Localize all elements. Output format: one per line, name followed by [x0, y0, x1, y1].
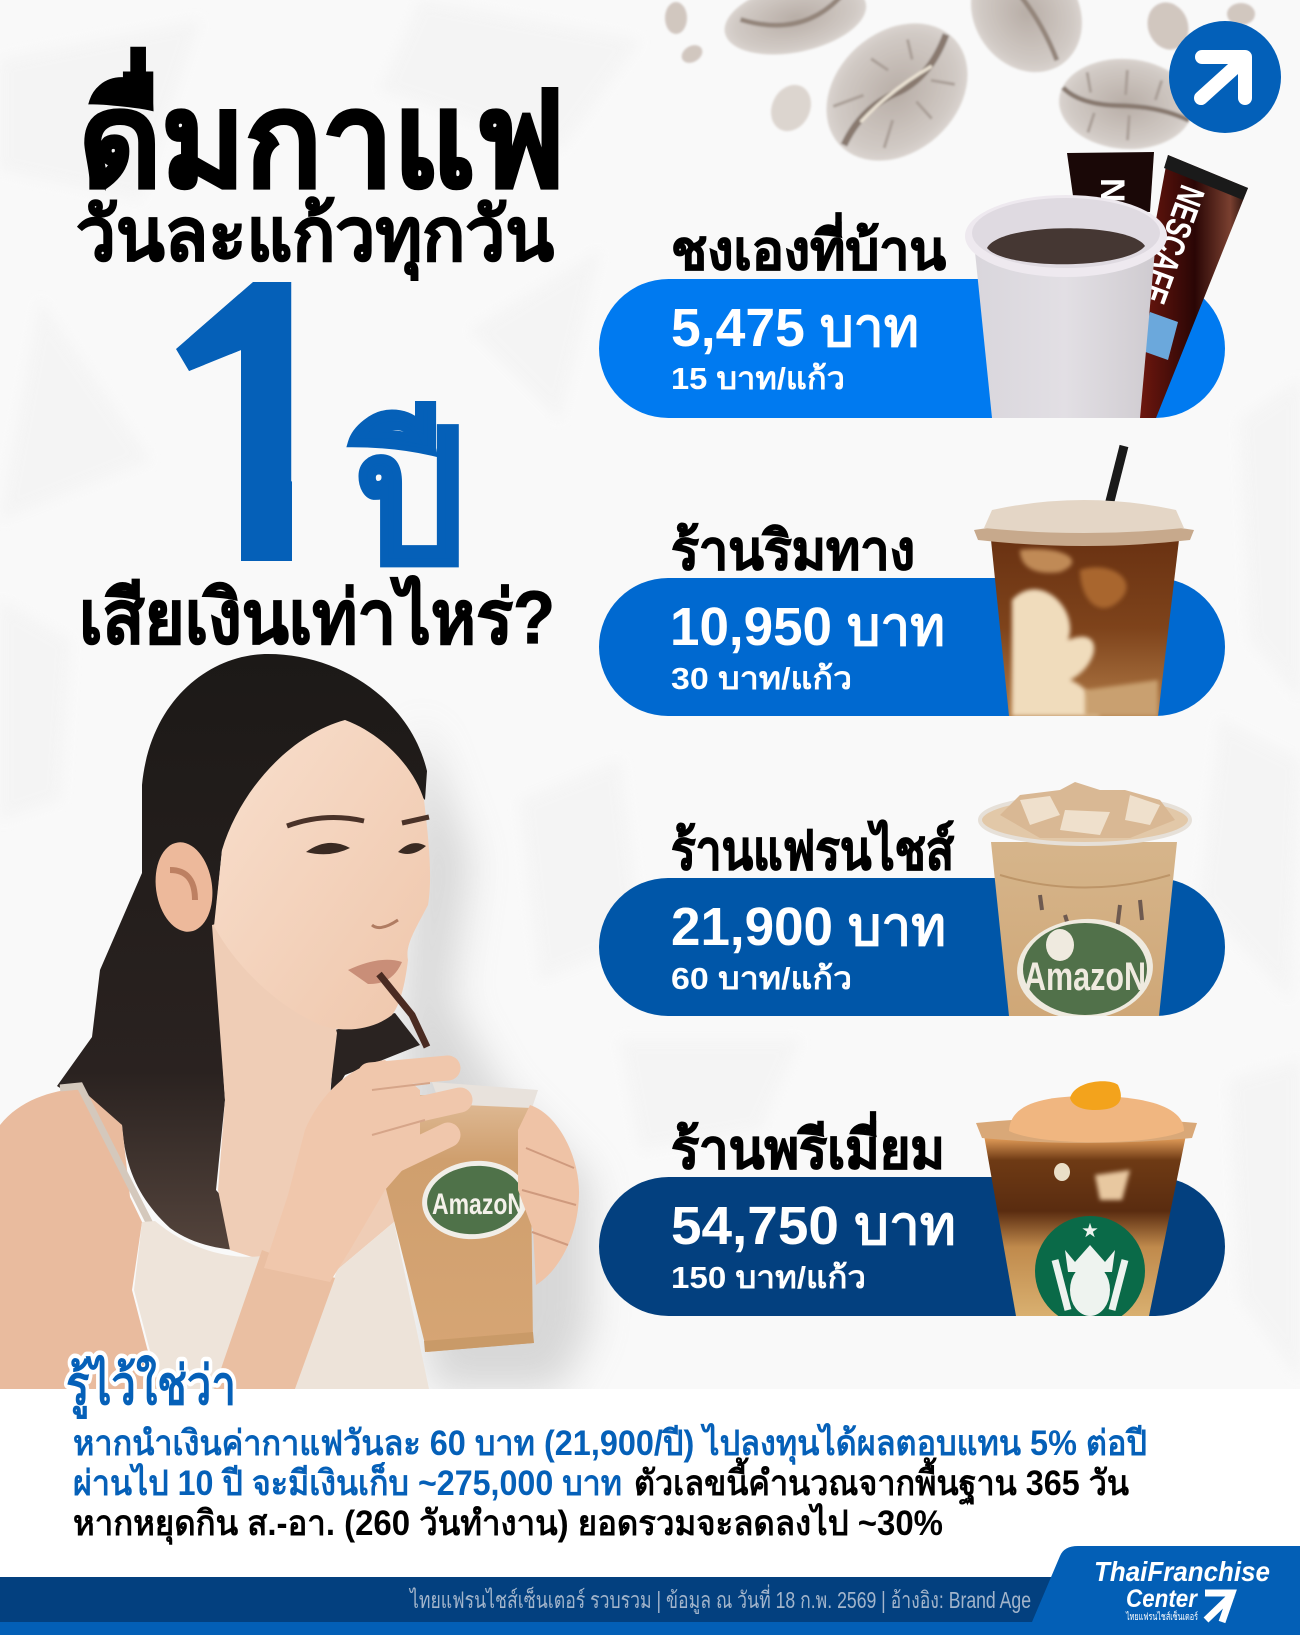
logo tagline: ไทยแฟรนไชส์เซ็นเตอร์ [1125, 1609, 1198, 1623]
forearm [214, 1250, 335, 1389]
icon: instant coffee sticks: NESCAFE [1133, 180, 1213, 309]
icon: Amazon iced latte [980, 782, 1190, 1024]
bean: top middle [948, 0, 1105, 94]
hair behind neck [330, 1013, 420, 1100]
icon: circular arrow badge [1169, 21, 1281, 133]
annual price: 21,900 บาท [671, 897, 946, 957]
decoration: blurred coffee beans [665, 0, 1255, 189]
bean: large centre [799, 0, 995, 189]
pill background [599, 279, 1225, 418]
price per cup: 15 บาท/แก้ว [671, 361, 845, 396]
heading: รู้ไว้ใช่ว่า [66, 1354, 236, 1419]
nose and lips [372, 920, 398, 928]
price per cup: 150 บาท/แก้ว [671, 1260, 866, 1295]
logo wordmark line 2: Center [1126, 1585, 1198, 1613]
logo: ThaiFranchise Center [1032, 1546, 1300, 1635]
heading: ชงเองที่บ้าน [671, 212, 946, 281]
price per cup: 60 บาท/แก้ว [671, 961, 852, 996]
panel: did you know [0, 1354, 1300, 1579]
panel: premium shop [599, 1081, 1225, 1326]
ear [150, 839, 218, 935]
icon: instant coffee sticks [1067, 152, 1248, 418]
annual price: 10,950 บาท [670, 597, 945, 657]
annual price: 54,750 บาท [671, 1196, 956, 1256]
body line 1: หากนำเงินค่ากาแฟวันละ 60 บาท (21,900/ปี) ไปลงทุนได้ผลตอบแทน 5% ต่อปี [73, 1422, 1147, 1465]
straw [379, 974, 427, 1047]
white background [0, 1389, 1300, 1579]
body line 3: หากหยุดกิน ส.-อา. (260 วันทำงาน) ยอดรวมจะลดลงไป ~30% [73, 1502, 943, 1545]
title line 2: วันละแก้วทุกวัน [76, 193, 554, 281]
neck and chest [212, 900, 395, 1270]
pill background [599, 1177, 1225, 1316]
body line 2 [73, 1457, 1129, 1506]
woman cup logo: AmazoN [432, 1188, 524, 1221]
icon: instant coffee sticks: NE [1093, 178, 1131, 225]
dress [134, 1221, 262, 1389]
bean: right [1056, 54, 1196, 154]
panel: franchise shop [599, 782, 1225, 1024]
icon: paper cup [965, 195, 1167, 418]
hair [57, 654, 427, 1251]
bean: top left [718, 0, 873, 66]
logo on cup [1017, 918, 1153, 1016]
title line 1: ดื่มกาแฟ [79, 47, 565, 214]
logo wordmark line 1: ThaiFranchise [1094, 1556, 1270, 1587]
woman cup logo [418, 1156, 532, 1244]
heading: ร้านริมทาง [671, 521, 915, 581]
title line 3: เสียเงินเท่าไหร่? [79, 574, 555, 659]
pill background [599, 878, 1225, 1016]
heading: ร้านพรีเมี่ยม [671, 1111, 945, 1180]
panel: roadside shop [599, 446, 1225, 716]
source text: ไทยแฟรนไชส์เซ็นเตอร์ รวบรวม | ข้อมูล ณ วันที่ 18 ก.พ. 2569 | อ้างอิง: Brand Age [408, 1584, 1031, 1614]
woman cup [385, 1095, 533, 1352]
icon: Amazon iced latte: AmazoN [1024, 955, 1146, 999]
panel: home brew [599, 152, 1248, 418]
photo: woman drinking iced coffee [0, 654, 590, 1389]
bean: small beans [665, 0, 1255, 138]
soft shadow behind woman [400, 720, 590, 1389]
pill background [599, 578, 1225, 716]
eyes [306, 843, 426, 854]
left shoulder and arm [0, 1088, 160, 1389]
face [214, 720, 430, 1029]
logo arrow [1205, 1593, 1232, 1622]
body line 2: ผ่านไป 10 ปี จะมีเงินเก็บ ~275,000 บาท [73, 1461, 622, 1503]
eyebrows [287, 817, 429, 826]
big word year: ปี [347, 396, 465, 603]
title block [76, 47, 565, 659]
body line 2: ตัวเลขนี้คำนวณจากพื้นฐาน 365 วัน [634, 1457, 1129, 1506]
supporting hand [518, 1105, 579, 1285]
dress strap [60, 1086, 150, 1224]
price per cup: 30 บาท/แก้ว [671, 661, 852, 696]
icon: iced latte with straw [974, 446, 1194, 716]
footer band [0, 1577, 1300, 1635]
heading: ร้านแฟรนไชส์ [671, 819, 954, 881]
icon: Starbucks frappe [976, 1081, 1197, 1326]
big number 1: 1 [172, 211, 312, 644]
holding hand [264, 1060, 460, 1282]
logo on cup [1035, 1216, 1145, 1326]
icon: Starbucks frappe: ★ [1082, 1223, 1098, 1240]
annual price: 5,475 บาท [671, 298, 919, 358]
